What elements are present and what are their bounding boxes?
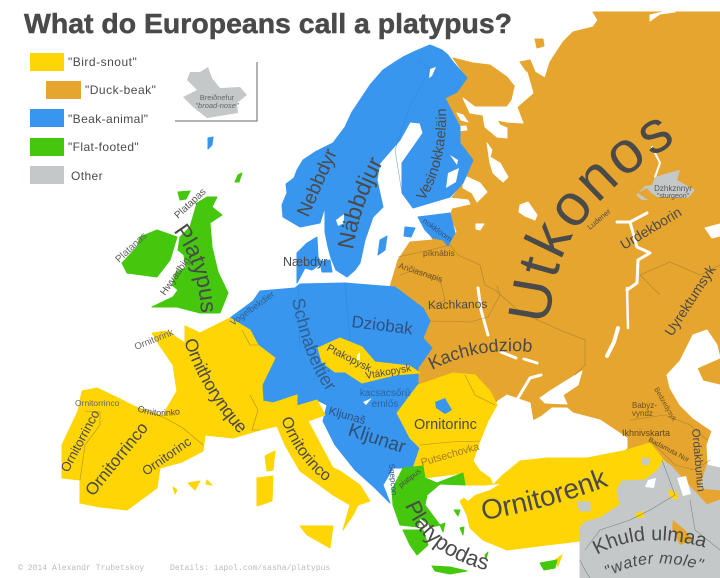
seas and lakes — [413, 12, 720, 478]
label: Schnabeltier German: Schnabeltier — [292, 298, 335, 390]
label: Hwyadbig Welsh: Hwyadbig — [158, 255, 193, 298]
label: Badamuta Nor Armenian: Badamuta Nor — [647, 437, 691, 464]
legend swatch: bird-snout: "Bird-snout" — [68, 55, 137, 69]
lakes over regions — [336, 67, 691, 496]
label: Uyrektumsyk: Uyrektumsyk — [661, 261, 719, 339]
inset: Iceland: Breiðnefur — [200, 93, 235, 102]
yellow and orange blotches over the other region — [636, 490, 693, 545]
sea: Marmara — [463, 484, 500, 501]
country borders — [80, 245, 720, 480]
credit: © 2014 Alexandr Trubetskoy — [18, 564, 144, 573]
label: Platapas Scottish: Platapas — [173, 187, 209, 221]
sea: Caspian — [667, 330, 720, 468]
label: Ludener: Ludener — [586, 207, 613, 232]
label: Dziobak Polish: Dziobak — [351, 312, 414, 339]
label: Utkonos: Utkonos — [508, 120, 672, 318]
map: beak-animal region (Scandinavia, Germany, Balkans) — [208, 45, 473, 503]
label: nokkloom Estonian: nokkloom — [421, 216, 454, 244]
map: duck-beak region (Russia, Ukraine, Belarus, Baltics) — [390, 12, 720, 505]
map: flat-footed region (British Isles, Greece, Cyprus) — [122, 173, 557, 574]
label: Ptakopysk Czech: Ptakopysk — [325, 342, 374, 375]
label: Ornitorinco Italian: Ornitorinco — [282, 417, 330, 480]
inset: Iceland — [175, 62, 257, 121]
label: platipus Macedonian: platipus — [397, 466, 423, 490]
label: Kljunar Serbian: Kljunar — [345, 420, 409, 458]
label: Ornitorinko Basque: Ornitorinko — [138, 406, 180, 416]
label: kacsacsőrű emlős Hungarian: kacsacsőrű — [360, 388, 411, 399]
credit: Details: iapol.com/sasha/platypus — [170, 564, 330, 573]
map: bird-snout region (France, Iberia, Italy, Czechia, Slovakia, Romania, Bulgaria, Turkey) — [62, 318, 673, 566]
label: kacsacsőrű emlős Hungarian — [360, 388, 411, 410]
label: Vesinokkaeläin: Vesinokkaeläin — [416, 109, 446, 198]
legend swatch: beak-animal: "Beak-animal" — [68, 112, 148, 126]
label: Vogelbekdier Dutch: Vogelbekdier — [228, 289, 276, 328]
map: other region (Iraq, Syria and Iran area) — [577, 458, 720, 578]
label: Ornitorinc Catalan: Ornitorinc — [139, 434, 194, 478]
label: Putsechovka Bulgarian: Putsechovka — [420, 441, 481, 469]
label: Sqepcon Albanian-area: Sqepcon — [387, 463, 399, 496]
label: Ornithorynque French: Ornithorynque — [186, 339, 245, 432]
title: What do Europeans call a platypus? — [24, 8, 512, 39]
rivers — [478, 147, 660, 398]
label: pīknābis Latvian: pīknābis — [423, 248, 455, 258]
label: Ornitorrinco Spanish: Ornitorrinco — [81, 419, 152, 500]
credit — [18, 564, 330, 573]
label: Dzhkznnyr sturgeon: "sturgeon" — [657, 193, 690, 200]
sea: Azov — [540, 371, 582, 404]
label: Ikhnivskarta Georgian: Ikhnivskarta — [622, 428, 670, 438]
label: Kljunaš Croatian: Kljunaš — [327, 405, 367, 427]
label: Ornitorrinco Galician: Ornitorrinco — [75, 398, 120, 408]
label: Näbbdjur: Näbbdjur — [338, 156, 382, 248]
label: Ornitorink Breton: Ornitorink — [133, 327, 176, 353]
label: Ornitorrinco Portuguese: Ornitorrinco — [57, 407, 103, 474]
label: Babyz-vyndz — [632, 401, 657, 418]
label: Ornitorenk Turkish: Ornitorenk — [482, 470, 609, 519]
label: Ančiasnapis Lithuanian: Ančiasnapis — [397, 260, 444, 284]
label: Platanas Irish: Platanas — [114, 231, 150, 265]
label: Ordakbunun Azeri: Ordakbunun — [689, 428, 706, 492]
sea: Black Sea — [475, 395, 627, 478]
label: Babyz-vyndz: Babyz- — [632, 401, 657, 410]
legend — [30, 53, 156, 184]
label: Nabdyr Danish: Næbdyr — [283, 255, 327, 269]
legend swatch: duck-beak: "Duck-beak" — [85, 83, 156, 97]
label: Vtákopysk Slovak: Vtákopysk — [365, 363, 413, 382]
label: Bedzedysyk: Bedzedysyk — [652, 386, 677, 423]
label: Urdekborin: Urdekborin — [617, 204, 684, 253]
label: Dzhkznnyr sturgeon — [636, 170, 695, 200]
Romanian lake detail — [435, 398, 452, 414]
label: Dzhkznnyr sturgeon: Dzhkznnyr — [654, 184, 692, 193]
sea: White Sea — [463, 72, 533, 138]
label: Khuld ulmaa Arabic: Khuld ulmaa — [592, 526, 706, 554]
label: Platypodas Greek: Platypodas — [406, 500, 488, 570]
label: Ornitorinc Romanian: Ornitorinc — [414, 417, 477, 433]
label: Kachkodziob Ukrainian: Kachkodziob — [428, 338, 532, 370]
label: Kachkanos Belarusian: Kachkanos — [428, 297, 487, 312]
label: Nebbdyr: Nebbdyr — [293, 145, 342, 220]
label: kacsacsőrű emlős Hungarian: emlős — [372, 399, 398, 410]
label: Platypus English: Platypus — [174, 223, 213, 312]
label: Babyz-vyndz: vyndz — [632, 409, 653, 418]
legend swatch: other: Other — [71, 169, 103, 183]
inset: Iceland: "broad-nose" — [195, 101, 239, 110]
legend swatch: flat-footed: "Flat-footed" — [68, 140, 139, 154]
